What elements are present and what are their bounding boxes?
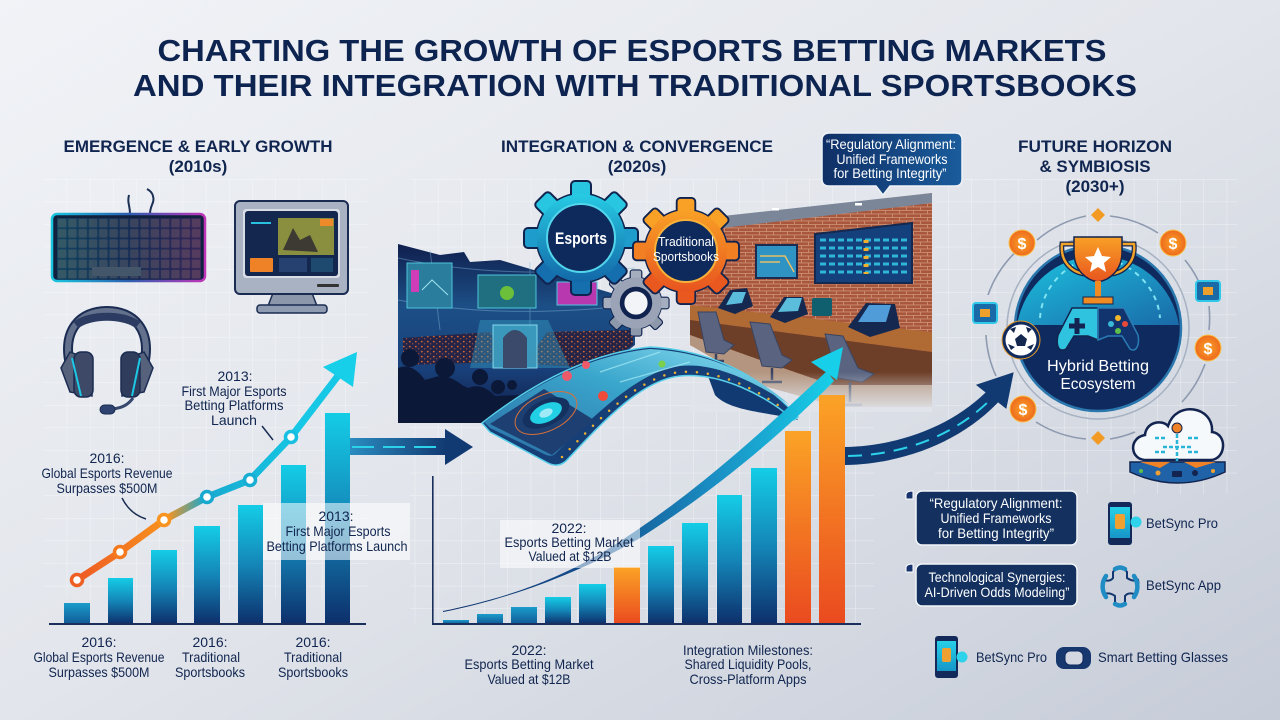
gear: small grey: [604, 271, 668, 335]
icon: coin bottom left: [1010, 396, 1036, 422]
axis labels: integration: Esports Betting Market: [464, 656, 594, 672]
heading: integration: (2020s): [608, 157, 666, 176]
gear: traditional sportsbooks: Sportsbooks: [653, 250, 719, 264]
chart: early growth trend line: [72, 352, 357, 586]
heading: emergence: (2010s): [169, 157, 227, 176]
axis labels: early growth: Traditional: [284, 649, 342, 665]
callout: 2016 above line: Surpasses $500M: [56, 480, 158, 496]
title: [133, 33, 1137, 103]
axis labels: early growth: Surpasses $500M: [48, 664, 150, 680]
heading: future: (2030+): [1065, 177, 1125, 196]
axis labels: early growth: 2016:: [192, 634, 228, 650]
title: CHARTING THE GROWTH OF ESPORTS BETTING MARKETS: [158, 33, 1106, 68]
callout: regulatory alignment: [906, 491, 1077, 545]
icon: soccer ball: [1002, 321, 1040, 359]
callout: 2022 on-chart note: [500, 520, 640, 568]
heading: future: & SYMBIOSIS: [1040, 157, 1150, 176]
arena central stage: [470, 320, 570, 368]
axis labels: early growth: 2016:: [81, 634, 117, 650]
callout: 2013 on-chart note: [263, 503, 410, 560]
icon: monitor: [235, 201, 348, 313]
icon: coin top left: [1009, 230, 1035, 256]
outer orbit ring: [986, 216, 1210, 439]
icon: coin top left: $: [1018, 236, 1027, 253]
icon: diamond bottom: [1091, 431, 1105, 445]
axis labels: integration: Cross-Platform Apps: [690, 671, 806, 687]
axis labels: integration: [464, 642, 813, 687]
icon: coin top right: [1160, 230, 1186, 256]
callout: technological synergies: Technological Synergies:: [928, 569, 1066, 585]
callout: 2022 on-chart note: 2022:: [551, 520, 587, 536]
sportsbook betting terminals: [718, 288, 900, 337]
callout: regulatory alignment banner: Unified Frameworks: [836, 151, 948, 167]
callout: 2013 on-chart note: 2013:: [318, 508, 354, 524]
trophy: [1062, 237, 1134, 304]
heading: emergence: EMERGENCE & EARLY GROWTH: [64, 137, 332, 156]
callout: 2022 on-chart note: Esports Betting Market: [504, 534, 634, 550]
callout: regulatory alignment banner: for Betting Integrity”: [834, 165, 947, 181]
axis labels: early growth: 2016:: [295, 634, 331, 650]
axis labels: early growth: Traditional: [182, 649, 240, 665]
heading: emergence: [64, 137, 332, 176]
callout: 2016 above line: 2016:: [89, 450, 125, 466]
controller: [1057, 308, 1139, 350]
axis labels: integration: Shared Liquidity Pools,: [684, 656, 812, 672]
icon: diamond top: [1091, 208, 1105, 222]
gear: traditional sportsbooks: [634, 199, 738, 303]
gears: [525, 182, 738, 335]
panel: hybrid betting ecosystem: Ecosystem: [1060, 376, 1136, 393]
panel: sportsbook room: [690, 193, 932, 412]
gear: esports: [525, 182, 637, 294]
icon: keyboard: [52, 189, 205, 281]
callout: technological synergies: AI-Driven Odds Modeling”: [924, 584, 1070, 600]
icon: coin top right: $: [1169, 236, 1178, 253]
axis labels: integration: Valued at $12B: [488, 671, 570, 687]
arrow: emergence to integration: [350, 429, 473, 465]
axis labels: early growth: [34, 634, 348, 680]
axis labels: early growth: Sportsbooks: [175, 664, 245, 680]
callout: regulatory alignment banner: [822, 133, 962, 195]
callout: 2013 above line: 2013:: [217, 368, 253, 384]
callout: 2013 above line: First Major Esports: [182, 383, 286, 399]
panel: hybrid betting ecosystem: Hybrid Betting: [1047, 358, 1149, 375]
axis labels: early growth: Sportsbooks: [278, 664, 348, 680]
gear: traditional sportsbooks: Traditional: [658, 235, 714, 249]
callout: 2013 on-chart note: First Major Esports: [286, 523, 390, 539]
item: smart betting glasses: Smart Betting Glasses: [1098, 649, 1228, 665]
heading: integration: INTEGRATION & CONVERGENCE: [501, 137, 773, 156]
axis labels: early growth: Global Esports Revenue: [34, 649, 165, 665]
panel: esports arena: [398, 244, 635, 423]
gear: esports: Esports: [555, 229, 607, 248]
icon: coin right: [1195, 335, 1221, 361]
callout: regulatory alignment banner: “Regulatory Alignment:: [826, 136, 956, 152]
chart: early growth bars: [49, 413, 366, 625]
callout: regulatory alignment: for Betting Integrity”: [938, 525, 1054, 541]
callout: regulatory alignment: Unified Frameworks: [940, 510, 1052, 526]
axis labels: integration: 2022:: [511, 642, 547, 658]
sportsbook odds board: [815, 223, 912, 283]
item: BetSync Pro phone bottom: [935, 636, 1047, 678]
item: BetSync Pro phone top: BetSync Pro: [1146, 515, 1218, 531]
item: smart betting glasses: [1056, 647, 1228, 669]
icon: small tile left: [973, 303, 997, 323]
sportsbook chairs: [698, 312, 874, 382]
icon: cloud server: [1130, 409, 1225, 483]
callout: 2016 above line: [42, 450, 173, 519]
panel: hybrid betting ecosystem: [973, 208, 1221, 445]
curved digital bridge: [482, 347, 798, 465]
heading: future: FUTURE HORIZON: [1018, 137, 1172, 156]
icon: coin bottom left: $: [1019, 402, 1028, 419]
item: BetSync App: BetSync App: [1146, 577, 1221, 593]
item: BetSync App: [1102, 567, 1221, 606]
callout: 2016 above line: Global Esports Revenue: [42, 465, 173, 481]
callout: 2022 on-chart note: Valued at $12B: [528, 548, 612, 564]
arrow: integration to future: [845, 373, 1013, 465]
heading: integration: [501, 137, 773, 176]
chart: integration bars: [432, 395, 861, 625]
callout: regulatory alignment: “Regulatory Alignment:: [930, 495, 1062, 511]
icon: coin right: $: [1204, 341, 1213, 358]
callout: technological synergies: [906, 564, 1077, 606]
icon: small tile right: [1196, 281, 1220, 301]
heading: future: [1018, 137, 1172, 196]
arena audience silhouettes: [398, 349, 520, 423]
callout: 2013 on-chart note: Betting Platforms Launch: [266, 538, 408, 554]
icon: headset: [61, 311, 153, 414]
callout: 2013 above line: Launch: [211, 412, 257, 428]
callout: 2013 above line: [182, 368, 286, 440]
item: BetSync Pro phone top: [1108, 502, 1218, 545]
item: BetSync Pro phone bottom: BetSync Pro: [976, 649, 1047, 665]
title: AND THEIR INTEGRATION WITH TRADITIONAL SPORTSBOOKS: [133, 68, 1137, 103]
callout: 2013 above line: Betting Platforms: [184, 397, 284, 413]
chart: integration growth curve: [443, 347, 843, 612]
axis labels: integration: Integration Milestones:: [683, 642, 813, 658]
